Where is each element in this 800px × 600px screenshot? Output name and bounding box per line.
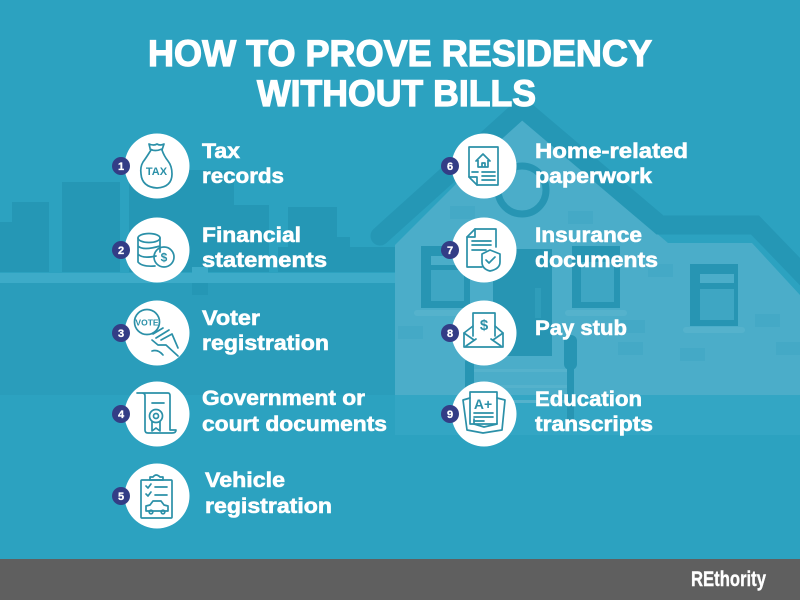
item 6: home-related paperwork: 6 <box>447 161 453 173</box>
icon: envelope with dollar: $ <box>480 317 489 334</box>
item 5: vehicle registration <box>112 464 332 528</box>
item 4: government or court documents <box>112 382 387 446</box>
item 1: tax records: 1 <box>118 161 124 173</box>
door <box>493 249 552 356</box>
house body <box>395 118 800 395</box>
porch posts <box>465 335 577 423</box>
wall bricks <box>398 206 800 361</box>
item 4: government or court documents: 4 <box>118 409 125 421</box>
icon: coins <box>138 234 174 267</box>
middle window <box>572 246 620 308</box>
item 7: insurance documents <box>441 218 658 282</box>
icon: vote button and hand <box>134 310 178 356</box>
window sills <box>414 310 745 333</box>
icon: coins: $ <box>161 250 168 264</box>
item 3: voter registration <box>112 300 329 366</box>
item 7: insurance documents: Insurance <box>535 224 642 247</box>
item 3: voter registration: registration <box>202 332 329 355</box>
item 8: pay stub <box>441 300 627 366</box>
item 5: vehicle registration: 5 <box>118 491 124 503</box>
item 9: education transcripts: Education <box>535 388 642 411</box>
item 3: voter registration: Voter <box>202 307 260 330</box>
item 4: government or court documents: court documents <box>202 413 387 436</box>
item 6: home-related paperwork: paperwork <box>535 165 652 188</box>
icon: house document <box>469 147 498 185</box>
item 3: voter registration: 3 <box>118 328 124 340</box>
logo text: REthority <box>691 568 766 591</box>
item 6: home-related paperwork <box>441 134 688 198</box>
attic round window <box>498 166 546 214</box>
ground strip <box>395 395 800 435</box>
title: HOW TO PROVE RESIDENCY <box>148 33 652 74</box>
footer bar <box>0 559 800 600</box>
item 5: vehicle registration: registration <box>205 495 332 518</box>
house <box>380 108 800 435</box>
item 2: financial statements <box>112 218 327 282</box>
title <box>148 33 652 114</box>
item 2: financial statements: statements <box>202 249 327 272</box>
icon: graded papers: A+ <box>474 396 492 412</box>
item 1: tax records: Tax <box>202 140 240 163</box>
icon: document with shield <box>467 229 500 271</box>
item 9: education transcripts: 9 <box>447 409 453 421</box>
icon: money bag <box>141 144 172 188</box>
item 7: insurance documents: 7 <box>447 245 453 257</box>
item 5: vehicle registration: Vehicle <box>205 469 285 492</box>
icon: certificate scroll <box>137 393 176 433</box>
right window <box>690 264 738 326</box>
item 6: home-related paperwork: Home-related <box>535 140 688 163</box>
icon: graded papers <box>463 392 505 433</box>
item 1: tax records: records <box>202 165 284 188</box>
ground band <box>0 267 395 283</box>
item 8: pay stub: Pay stub <box>535 317 627 340</box>
item 9: education transcripts: transcripts <box>535 413 653 436</box>
item 2: financial statements: Financial <box>202 224 301 247</box>
skyline silhouette <box>0 170 396 395</box>
item 8: pay stub: 8 <box>447 328 453 340</box>
left window <box>421 246 470 308</box>
title: WITHOUT BILLS <box>257 73 536 114</box>
icon: clipboard with car <box>141 475 172 518</box>
item 2: financial statements: 2 <box>118 245 124 257</box>
icon: envelope with dollar <box>464 313 503 347</box>
roof <box>380 108 800 282</box>
item 9: education transcripts <box>441 382 653 446</box>
icon: money bag: TAX <box>146 166 168 178</box>
steps <box>470 369 570 403</box>
item 4: government or court documents: Government or <box>202 387 365 410</box>
icon: vote button and hand: VOTE <box>135 318 159 328</box>
item 1: tax records <box>112 134 284 198</box>
item 7: insurance documents: documents <box>535 249 658 272</box>
